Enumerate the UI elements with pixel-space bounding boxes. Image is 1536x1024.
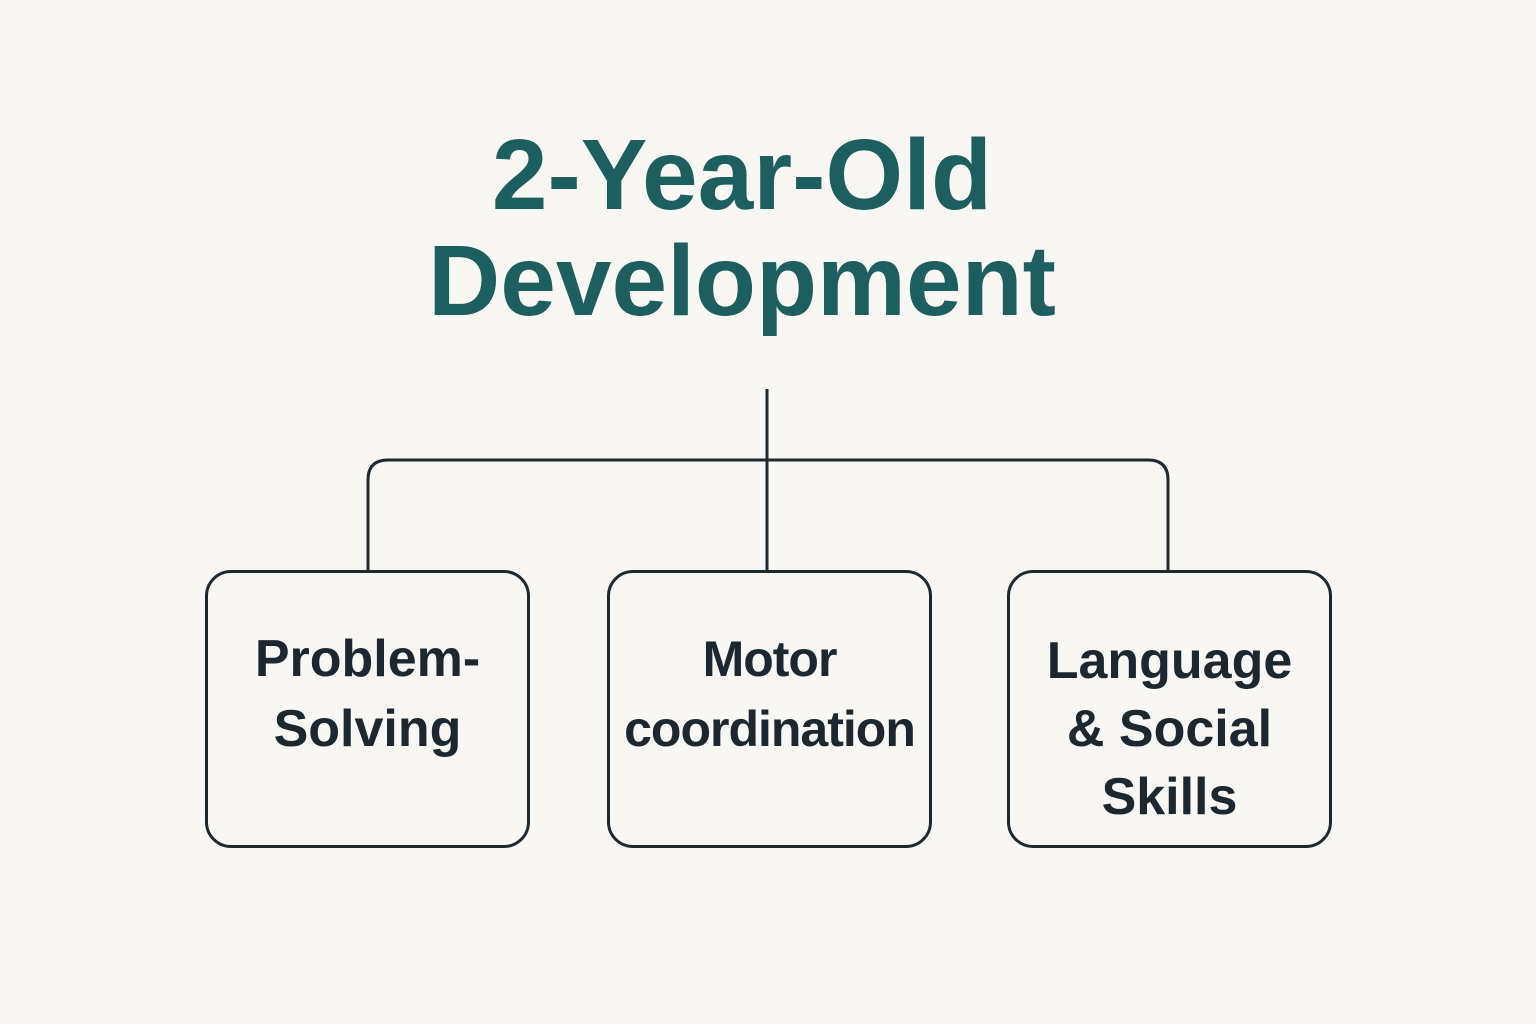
- label: problem-solving: Solving: [274, 700, 461, 758]
- title: 2-Year-Old: [492, 119, 992, 231]
- label: motor coordination: Motor: [703, 631, 836, 687]
- label: language & social skills: Skills: [1102, 768, 1237, 826]
- box: motor coordination: [607, 570, 932, 848]
- box: problem-solving: [205, 570, 530, 848]
- label: problem-solving: Problem-: [255, 630, 480, 688]
- label: language & social skills: [1047, 632, 1292, 826]
- title: [428, 119, 1056, 337]
- label: language & social skills: Language: [1047, 632, 1292, 690]
- title: Development: [428, 225, 1056, 337]
- label: language & social skills: & Social: [1067, 700, 1272, 758]
- label: motor coordination: [624, 631, 915, 757]
- label: problem-solving: [255, 630, 480, 758]
- label: motor coordination: coordination: [624, 701, 915, 757]
- box: language & social skills: [1007, 570, 1332, 848]
